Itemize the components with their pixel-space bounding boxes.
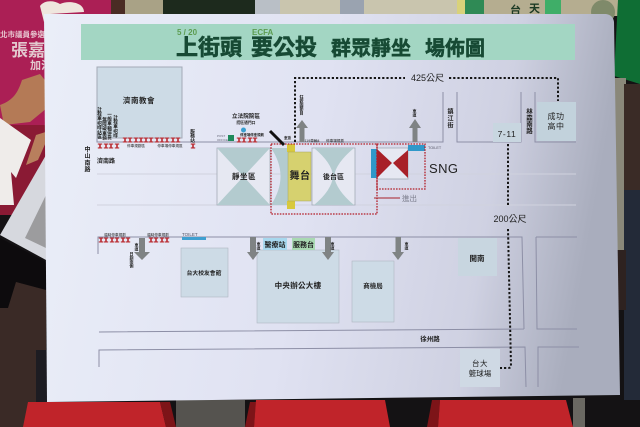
building: 開南: 開南 — [470, 253, 485, 263]
red stools — [23, 400, 573, 427]
service desk — [292, 238, 315, 250]
arrow down 1 — [134, 238, 150, 260]
vertical parking labels: 計程車招呼 — [113, 114, 118, 138]
road label: 濟南路: 濟南路 — [97, 157, 115, 165]
sit-in zone: 靜坐區 — [217, 148, 270, 205]
entry/exit legend: 進出 — [402, 193, 417, 203]
legislature area label: OFFICE — [217, 138, 228, 142]
vertical parking labels: 計程車招呼站區 — [97, 106, 102, 141]
building: 商檢局: 商檢局 — [363, 281, 383, 290]
lane labels: 日劃南側 — [130, 252, 134, 269]
toilet bar: TOILET — [182, 232, 198, 237]
hand on board — [0, 74, 48, 125]
road label: 鎮江街: 鎮江街 — [446, 107, 453, 129]
vertical parking labels: 無障礙車輛 — [102, 116, 108, 141]
backstage zone: 後台區: 後台區 — [323, 172, 344, 181]
arrow down 2 — [247, 237, 259, 260]
small labels near toilets: 臨時停車規劃 — [104, 232, 126, 237]
building: 商檢局 — [352, 261, 394, 322]
medical station: 醫療站 — [264, 240, 286, 249]
small labels near toilets: 停車場規劃 — [326, 138, 344, 143]
lane labels: 車道 — [134, 242, 140, 252]
legislature area label — [217, 112, 264, 142]
legislature area label: 院區通門口 — [237, 120, 256, 125]
black dotted route: 200 metres — [493, 144, 527, 368]
building: 中央辦公大樓: 中央辦公大樓 — [275, 280, 322, 290]
red portable toilets — [98, 138, 257, 242]
road label: 徐州路: 徐州路 — [420, 334, 440, 343]
black dotted route: 200 metres: 200公尺 — [493, 214, 527, 224]
legislature area label: POST — [217, 134, 225, 138]
building: 中央辦公大樓 — [257, 250, 339, 323]
white paper roll — [0, 155, 46, 260]
arrow down 3 — [322, 237, 334, 260]
photo background: 天 — [529, 2, 540, 15]
building: 開南 — [458, 238, 497, 276]
lane labels: 狂歡園節目 — [300, 94, 304, 116]
sit-in zone: 靜坐區: 靜坐區 — [232, 171, 256, 181]
toilet bar — [182, 232, 206, 240]
lane labels: 車道 — [404, 241, 410, 251]
SNG area: TOILET — [428, 146, 442, 150]
building: 台大校友會館: 台大校友會館 — [187, 269, 222, 277]
arrow down 4 — [392, 237, 404, 260]
black dotted route: 425 metres: 425公尺 — [411, 73, 444, 83]
lane labels: 車道 — [284, 135, 292, 140]
entry/exit legend — [374, 193, 417, 203]
stage: 舞台: 舞台 — [290, 169, 310, 182]
building: 7-11 — [493, 123, 521, 142]
small labels near toilets: 停車場停車規區 — [157, 143, 183, 148]
stage: 舞台 — [287, 144, 311, 209]
title text — [176, 35, 485, 60]
arrow up 1 — [296, 120, 308, 142]
legislature area label: 立法院院區 — [232, 112, 260, 120]
building: 成功高中: 高中 — [548, 121, 564, 131]
building: 成功高中: 成功 — [548, 111, 564, 121]
road label: 中山南路: 中山南路 — [83, 145, 90, 174]
black pointer — [270, 131, 284, 145]
small labels near toilets: 臨時停車規劃 — [147, 232, 169, 237]
backstage zone: 後台區 — [312, 148, 355, 205]
vertical parking labels: 服務站 — [190, 128, 196, 144]
title banner — [81, 24, 575, 60]
service desk: 服務台 — [293, 240, 314, 249]
road label: 林森南路: 林森南路 — [524, 107, 533, 135]
small labels near toilets: 停車規劃區 — [127, 143, 145, 148]
black shorts — [0, 238, 46, 308]
building: 濟南教會 — [97, 67, 182, 138]
building: 台大校友會館 — [181, 248, 228, 297]
lane labels: 車道 — [412, 108, 418, 118]
photo background: 加油 — [30, 58, 52, 72]
building: 台大籃球場 — [460, 349, 500, 387]
photo background: 張嘉 — [11, 41, 45, 60]
photo background: 台 — [510, 3, 521, 17]
backstage left wedge — [271, 148, 288, 205]
title text: 群眾靜坐 — [331, 37, 411, 60]
title text: 場佈圖 — [425, 37, 485, 60]
road lines — [97, 92, 579, 387]
arrow up 2 — [409, 119, 421, 142]
small labels near toilets — [104, 138, 344, 237]
small labels near toilets: 119車輛4 — [305, 138, 319, 143]
date label: 5 / 20 — [177, 28, 198, 37]
building: 台大籃球場: 台大 — [472, 358, 488, 368]
lane labels — [130, 94, 418, 269]
gray arrows — [134, 119, 421, 260]
legislature area label: 停車場停車規劃 — [240, 132, 264, 137]
building: 7-11: 7-11 — [498, 129, 516, 139]
lane labels: 車道 — [330, 241, 336, 251]
red dotted perimeters — [271, 144, 425, 214]
vertical parking labels — [97, 106, 196, 144]
fingers on board edge — [26, 125, 71, 165]
building: 成功高中 — [537, 102, 576, 141]
lane labels: 車道 — [256, 241, 262, 251]
SNG area — [371, 145, 458, 179]
SNG area: SNG — [429, 161, 458, 176]
medical station — [263, 238, 287, 250]
building: 濟南教會: 濟南教會 — [123, 95, 155, 105]
vertical parking labels: 一般車輛停靠 — [107, 112, 112, 141]
photo background: 北市議員參選 — [0, 29, 45, 39]
white sleeve — [0, 118, 31, 205]
title text: 上街頭 — [176, 35, 242, 60]
building: 台大籃球場: 籃球場 — [469, 368, 492, 378]
black dotted route: 425 metres — [295, 73, 558, 142]
title text: 要公投 — [251, 35, 317, 60]
ECFA label: ECFA — [252, 28, 274, 37]
